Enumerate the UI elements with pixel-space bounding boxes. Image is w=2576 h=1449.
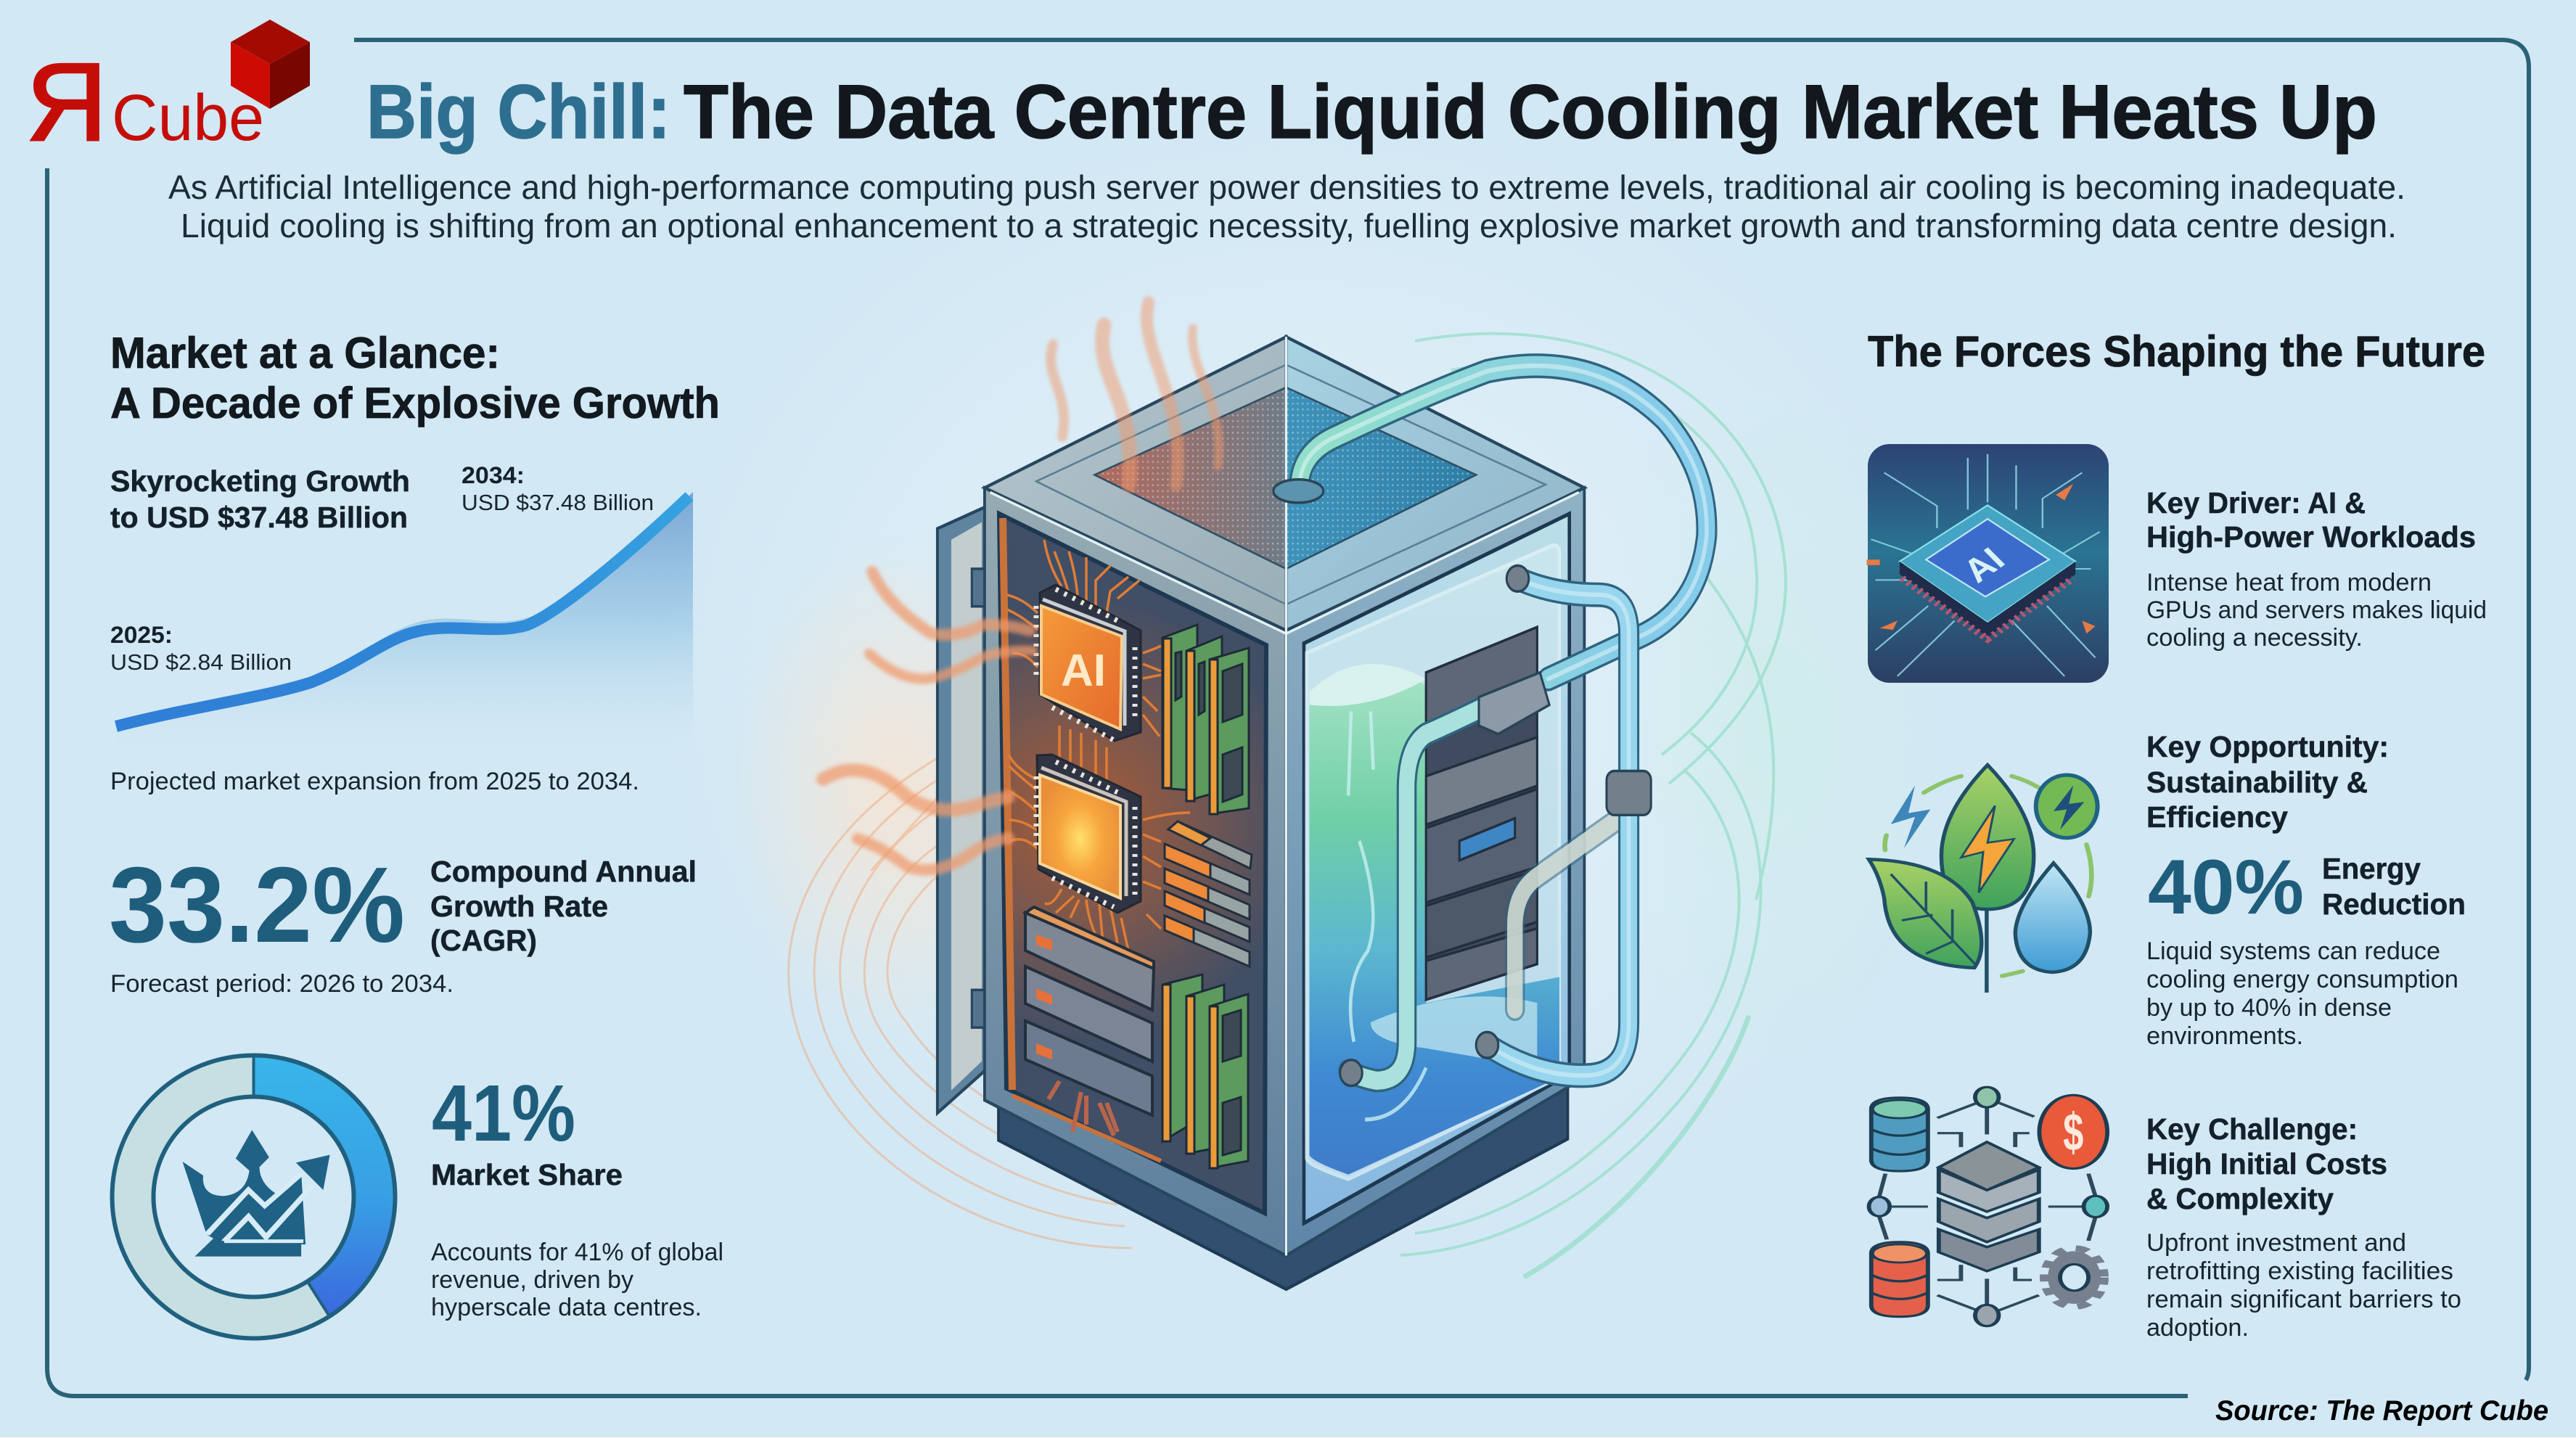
label 2034: USD $37.48 Billion: [462, 490, 654, 515]
text: key challenge: & Complexity: [2146, 1182, 2334, 1215]
logo wordmark: Я: [26, 41, 107, 164]
circuit traces: [1007, 540, 1190, 1136]
stat: 41% market share text: [431, 1069, 723, 1321]
heading: forces: The Forces Shaping the Future: [1868, 327, 2485, 376]
text: key opportunity: Liquid systems can reduce: [2146, 937, 2440, 965]
heat waves: top: [1051, 303, 1219, 485]
icon: AI chip card: AI: [1955, 541, 2013, 590]
title: Big Chill:: [366, 70, 670, 155]
door: [938, 507, 997, 1113]
text: key challenge: adoption.: [2146, 1314, 2249, 1342]
storage sleds: [1165, 821, 1252, 966]
pipe fittings: [1273, 480, 1651, 1085]
donut chart: 41% market share: [112, 1055, 395, 1338]
text: key challenge: Key Challenge:: [2146, 1112, 2358, 1146]
text: key opportunity: by up to 40% in dense: [2146, 994, 2392, 1022]
chip: AI: AI: [1061, 646, 1106, 696]
label 2025: 2025:: [110, 622, 173, 648]
top face: [985, 303, 1584, 633]
stat: 41% market share text: hyperscale data centres.: [431, 1294, 702, 1321]
text: key driver: High-Power Workloads: [2146, 520, 2476, 554]
text: key opportunity: [2146, 730, 2466, 1050]
pipe: right riser: [1487, 578, 1629, 1075]
source credit: Source: The Report Cube: [2215, 1395, 2548, 1427]
text: key driver: cooling a necessity.: [2146, 624, 2363, 652]
chip: glowing processor: [1036, 755, 1141, 913]
drive bays: [1025, 907, 1154, 1115]
stat: CAGR 33.2%: 33.2%: [109, 845, 405, 965]
stat: 41% market share text: 41%: [432, 1069, 575, 1158]
heading: market at a glance: [110, 329, 720, 427]
text: key opportunity: cooling energy consumption: [2146, 966, 2458, 993]
swirl rings: heat: [789, 755, 1132, 1248]
label 2034: 2034:: [462, 462, 525, 488]
text: key opportunity: Efficiency: [2146, 800, 2288, 834]
text: key opportunity: 40%: [2148, 843, 2304, 930]
text: key opportunity: environments.: [2146, 1022, 2303, 1050]
memory modules: lower: [1162, 974, 1248, 1168]
text: key opportunity: Sustainability &: [2146, 765, 2368, 799]
subheading: skyrocketing growth: Skyrocketing Growth: [110, 464, 410, 498]
label 2025: [110, 622, 292, 675]
coolant tank: [1307, 546, 1559, 1179]
plinth: [998, 1087, 1567, 1289]
orange edge strips: [1003, 518, 1161, 1161]
coolant pipes: [1300, 366, 1707, 1080]
text: key opportunity: Energy: [2322, 852, 2421, 885]
forecast caption: Forecast period: 2026 to 2034.: [110, 970, 454, 998]
icon: red cube: [231, 20, 310, 109]
left face frame: [985, 488, 1286, 1255]
text: key challenge: remain significant barriers to: [2146, 1286, 2461, 1313]
text: key driver: [2146, 486, 2487, 652]
interior panel: [999, 514, 1266, 1213]
label 2025: USD $2.84 Billion: [110, 649, 292, 675]
swirl rings: coolant: [1400, 334, 1786, 1277]
heading: market at a glance: Market at a Glance:: [110, 329, 500, 377]
right face: [1286, 488, 1584, 1255]
stat: 41% market share text: revenue, driven by: [431, 1266, 633, 1294]
stat: CAGR 33.2%: Compound Annual: [430, 855, 697, 888]
intro paragraph: As Artificial Intelligence and high-performance computing push server power densities to extreme levels, traditional air cooling is becoming inadequate.: [168, 168, 2405, 206]
pipe: main outlet: [1300, 366, 1707, 679]
stat: 41% market share text: Accounts for 41% of global: [431, 1239, 723, 1266]
stat: 41% market share text: Market Share: [431, 1158, 623, 1191]
chip: AI: [1036, 585, 1141, 741]
logo wordmark: Cube: [112, 82, 264, 155]
stat: CAGR 33.2%: Growth Rate: [430, 890, 608, 923]
mesh vent: [1094, 387, 1476, 569]
icon: network, servers, cost and gear: [1869, 1087, 2107, 1326]
icon: AI chip card: [1866, 444, 2109, 683]
area line chart: [116, 492, 693, 758]
subheading: skyrocketing growth: [110, 464, 410, 534]
pipe: left riser: [1348, 708, 1482, 1080]
panel: market at a glance: [109, 329, 723, 1338]
intro paragraph: [168, 168, 2405, 245]
hinges: [972, 569, 997, 1027]
stat: CAGR 33.2%: [109, 845, 697, 965]
left face components, page coordinates: [823, 514, 1266, 1213]
heading: market at a glance: A Decade of Explosive Growth: [110, 379, 720, 427]
text: key challenge: [2146, 1112, 2461, 1342]
icon: crown with arrow: [183, 1130, 330, 1257]
stat: CAGR 33.2%: (CAGR): [430, 924, 537, 957]
label 2034: [462, 462, 654, 515]
text: key challenge: High Initial Costs: [2146, 1147, 2387, 1181]
pipe: return loop lower: [1515, 821, 1615, 1009]
icon: network, servers, cost and gear: $: [2063, 1103, 2083, 1162]
text: key challenge: retrofitting existing facilities: [2146, 1257, 2453, 1285]
heat waves: left: [823, 572, 1033, 870]
server stack: [1426, 627, 1537, 1000]
intro paragraph: Liquid cooling is shifting from an optional enhancement to a strategic necessity, fuelling explosive market growth and transforming data centre design.: [181, 207, 2397, 245]
panel: forces shaping the future: [1866, 327, 2487, 1342]
logo: RCube: [26, 20, 310, 164]
text: key opportunity: Key Opportunity:: [2146, 730, 2389, 763]
text: key challenge: Upfront investment and: [2146, 1229, 2406, 1257]
subheading: skyrocketing growth: to USD $37.48 Billion: [110, 501, 408, 534]
title: The Data Centre Liquid Cooling Market Heats Up: [684, 70, 2377, 155]
text: key driver: Intense heat from modern: [2146, 569, 2432, 596]
chart caption: Projected market expansion from 2025 to 2034.: [110, 768, 639, 795]
illustration: liquid cooled server cabinet: [823, 303, 1707, 1289]
logo wordmark: [26, 41, 264, 164]
text: key opportunity: Reduction: [2322, 887, 2466, 921]
icon: leaves, energy and water: [1869, 765, 2098, 993]
text: key driver: Key Driver: AI &: [2146, 486, 2366, 520]
text: key driver: GPUs and servers makes liquid: [2146, 596, 2487, 624]
memory modules: upper: [1162, 625, 1249, 814]
